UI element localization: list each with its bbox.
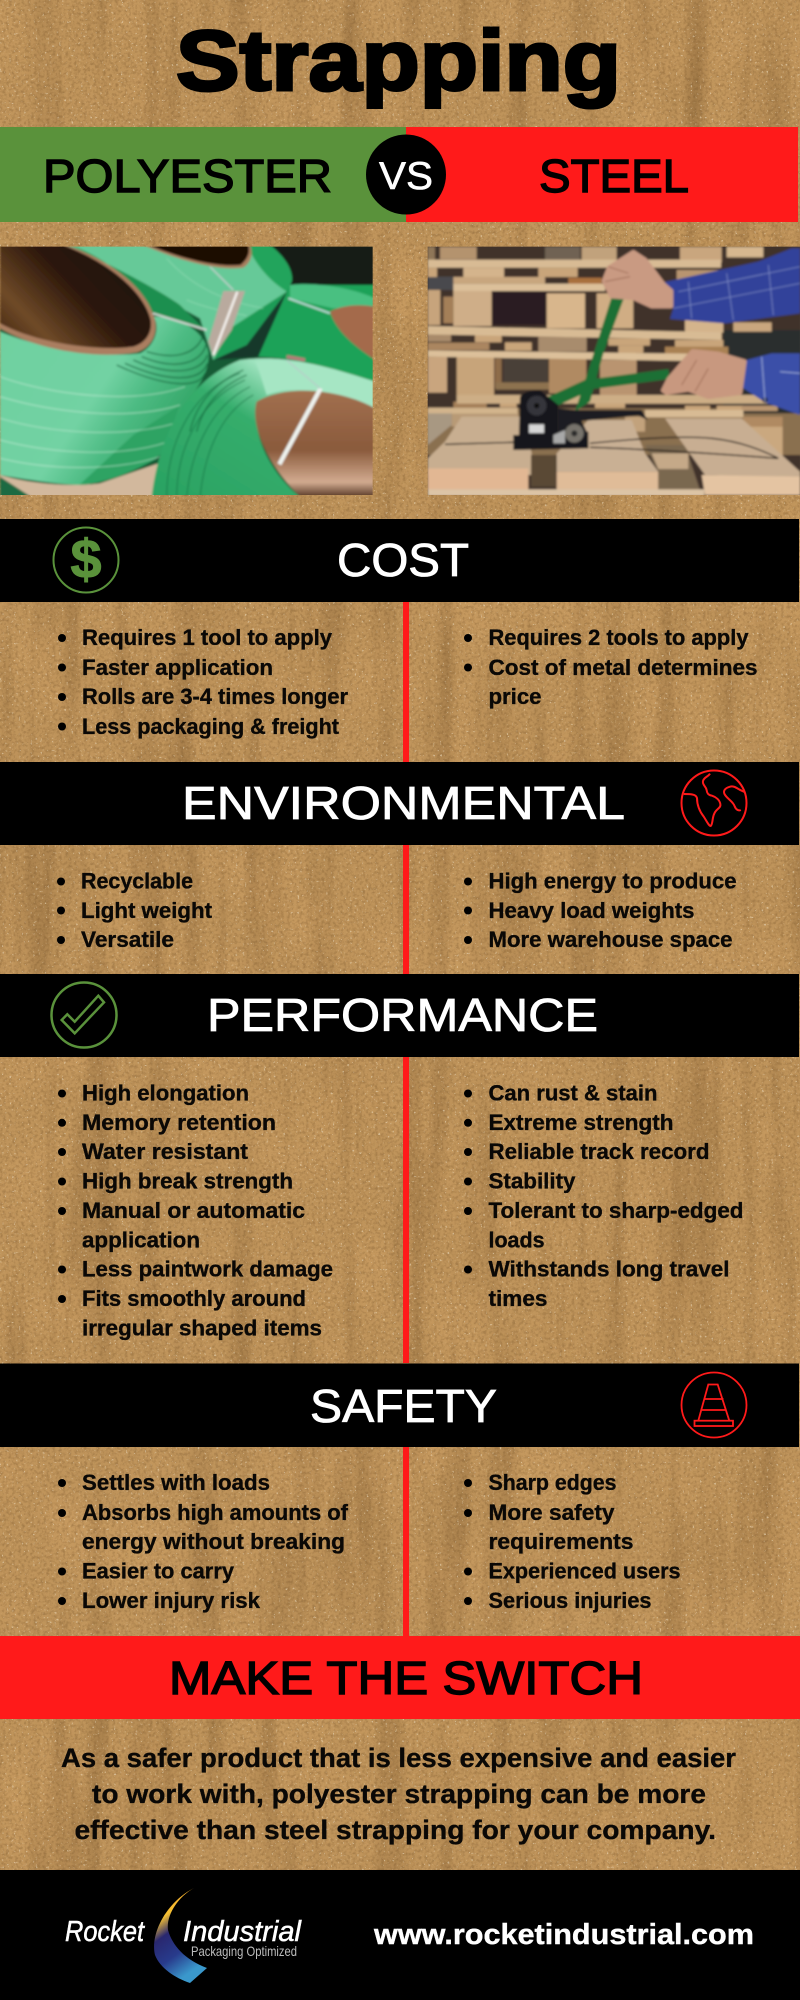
performance steel list: Stability bbox=[488, 1169, 576, 1194]
upper hand bbox=[604, 252, 671, 306]
performance polyester list: Memory retention bbox=[82, 1110, 276, 1135]
cost steel list: Cost of metal determines bbox=[488, 655, 758, 680]
right roll bbox=[258, 285, 375, 382]
polyester half bbox=[0, 127, 406, 222]
cost polyester list bbox=[58, 625, 348, 739]
icon: dollar bbox=[54, 528, 118, 592]
photo: polyester strap rolls bbox=[0, 245, 375, 498]
logo: Rocket Industrial: Industrial bbox=[183, 1916, 303, 1948]
footer bbox=[0, 1870, 800, 2000]
cost polyester list: Requires 1 tool to apply bbox=[82, 625, 333, 650]
closing paragraph: effective than steel strapping for your company. bbox=[74, 1815, 716, 1845]
safety steel list: Experienced users bbox=[488, 1559, 680, 1584]
upper sleeve bbox=[663, 248, 800, 323]
divider: safety bbox=[403, 1447, 409, 1636]
performance steel list: times bbox=[488, 1286, 548, 1311]
environmental polyester list: Versatile bbox=[81, 927, 174, 952]
safety band bbox=[0, 1364, 799, 1447]
top roll bbox=[67, 245, 292, 360]
steel label: STEEL bbox=[539, 150, 689, 202]
performance steel list: Extreme strength bbox=[488, 1110, 674, 1135]
performance steel list: Withstands long travel bbox=[488, 1257, 730, 1282]
section: safety bbox=[0, 1364, 799, 1636]
cost polyester list: Less packaging & freight bbox=[82, 714, 340, 739]
environmental polyester list: Light weight bbox=[81, 898, 213, 923]
steel half bbox=[406, 127, 798, 222]
logo: Rocket Industrial bbox=[65, 1888, 303, 1983]
lower roll bbox=[152, 358, 375, 498]
pallet blocks bbox=[428, 247, 783, 457]
make the switch banner bbox=[0, 1636, 800, 1719]
safety steel list: Sharp edges bbox=[488, 1470, 616, 1495]
icon: dollar: $ bbox=[70, 528, 102, 590]
safety polyester list: Absorbs high amounts of bbox=[82, 1500, 349, 1525]
environmental steel list: More warehouse space bbox=[488, 927, 732, 952]
performance polyester list: Fits smoothly around bbox=[82, 1286, 306, 1311]
icon: rocket swoosh bbox=[154, 1888, 207, 1983]
section: environmental bbox=[0, 762, 799, 974]
polyester label: POLYESTER bbox=[43, 150, 332, 202]
environmental steel list: Heavy load weights bbox=[488, 898, 694, 923]
performance polyester list: application bbox=[82, 1227, 200, 1252]
safety steel list: Serious injuries bbox=[488, 1588, 652, 1613]
performance polyester list: Manual or automatic bbox=[82, 1198, 305, 1223]
icon: traffic cone bbox=[682, 1372, 746, 1438]
tool handles bbox=[575, 295, 624, 412]
safety steel list: More safety bbox=[488, 1500, 615, 1525]
divider: performance bbox=[403, 1057, 409, 1363]
dark slope bbox=[70, 245, 205, 330]
bottom pallet boards bbox=[428, 413, 452, 445]
performance polyester list: irregular shaped items bbox=[82, 1315, 322, 1340]
environmental steel list: High energy to produce bbox=[488, 868, 736, 894]
performance steel list: loads bbox=[488, 1227, 544, 1252]
divider: environmental bbox=[403, 845, 409, 974]
environmental band bbox=[0, 762, 799, 845]
performance band bbox=[0, 974, 799, 1057]
vs badge bbox=[366, 134, 446, 214]
closing paragraph: As a safer product that is less expensive and easier bbox=[61, 1743, 736, 1773]
safety polyester list bbox=[58, 1470, 349, 1613]
icon: check mark bbox=[52, 982, 116, 1048]
comparison banner bbox=[0, 127, 798, 222]
lower sleeve bbox=[741, 353, 800, 415]
cost steel list: price bbox=[488, 684, 542, 709]
performance polyester list: High break strength bbox=[82, 1169, 293, 1194]
performance steel list: Reliable track record bbox=[488, 1139, 710, 1164]
divider: cost bbox=[403, 602, 409, 762]
environmental steel list bbox=[464, 868, 736, 952]
closing paragraph: to work with, polyester strapping can be more bbox=[92, 1779, 706, 1809]
safety polyester list: energy without breaking bbox=[82, 1529, 345, 1554]
performance steel list: Can rust & stain bbox=[488, 1081, 658, 1106]
big roll bbox=[0, 317, 209, 485]
performance heading: PERFORMANCE bbox=[207, 989, 598, 1041]
safety steel list: requirements bbox=[488, 1529, 634, 1554]
performance polyester list: High elongation bbox=[82, 1081, 249, 1106]
pallet planks bbox=[428, 260, 773, 417]
safety heading: SAFETY bbox=[310, 1380, 497, 1432]
closing paragraph bbox=[61, 1743, 736, 1845]
big roll core bbox=[0, 245, 156, 355]
performance polyester list bbox=[58, 1081, 333, 1340]
cost polyester list: Rolls are 3-4 times longer bbox=[82, 684, 348, 709]
steel strap bbox=[445, 437, 778, 458]
vs badge: VS bbox=[379, 155, 433, 198]
tool body bbox=[513, 390, 588, 450]
logo: Rocket Industrial: Rocket bbox=[65, 1916, 146, 1948]
lower-left cardboard bbox=[0, 463, 158, 498]
safety steel list bbox=[464, 1470, 680, 1613]
performance steel list bbox=[464, 1081, 744, 1311]
safety polyester list: Easier to carry bbox=[82, 1559, 235, 1584]
logo: Rocket Industrial: Packaging Optimized bbox=[191, 1943, 297, 1959]
environmental heading: ENVIRONMENTAL bbox=[182, 777, 625, 829]
environmental polyester list bbox=[57, 868, 213, 952]
cardboard tab bbox=[208, 291, 245, 357]
cost steel list bbox=[464, 625, 758, 709]
lower hand bbox=[663, 351, 744, 397]
environmental polyester list: Recyclable bbox=[81, 868, 193, 894]
safety polyester list: Settles with loads bbox=[82, 1470, 270, 1495]
cost band bbox=[0, 519, 799, 602]
cost heading: COST bbox=[337, 534, 469, 586]
cost polyester list: Faster application bbox=[82, 655, 273, 680]
photo: steel strap tensioner on pallets bbox=[425, 245, 800, 498]
title: Strapping bbox=[176, 14, 621, 109]
website url: www.rocketindustrial.com bbox=[373, 1919, 754, 1951]
performance polyester list: Water resistant bbox=[82, 1139, 249, 1164]
performance polyester list: Less paintwork damage bbox=[82, 1257, 333, 1282]
cost steel list: Requires 2 tools to apply bbox=[488, 625, 749, 650]
safety polyester list: Lower injury risk bbox=[82, 1588, 261, 1613]
performance steel list: Tolerant to sharp-edged bbox=[488, 1198, 744, 1223]
section: cost bbox=[0, 519, 799, 762]
icon: globe bbox=[682, 770, 746, 836]
section: performance bbox=[0, 974, 799, 1363]
banner heading: MAKE THE SWITCH bbox=[169, 1652, 643, 1704]
